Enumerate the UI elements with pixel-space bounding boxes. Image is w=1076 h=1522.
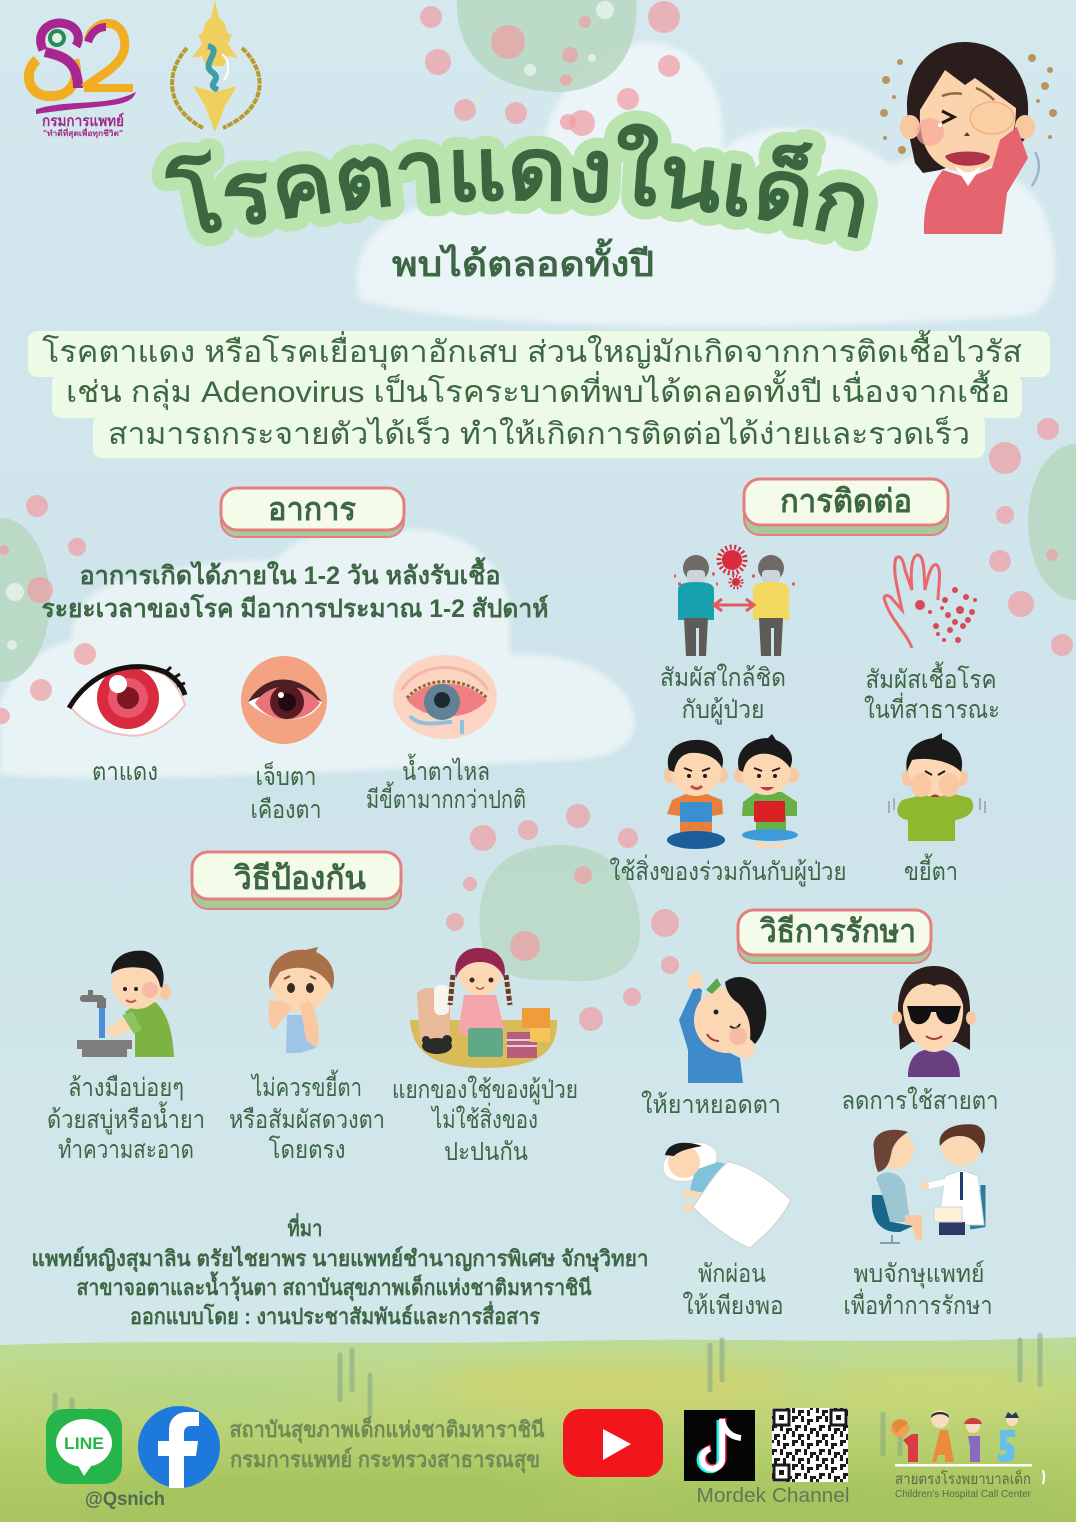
icon: QR code [772, 1408, 848, 1482]
logo: children's hospital call centre 1415: Children's Hospital Call Center [895, 1489, 1032, 1500]
logo tagline: "ทำดีที่สุดเพื่อทุกชีวิต" [43, 127, 123, 139]
text: credits: ที่มา [288, 1212, 322, 1241]
background: virus right [989, 418, 1076, 656]
background: virus centre [446, 804, 679, 1031]
icon: YouTube [563, 1409, 663, 1477]
background: clouds [0, 42, 1055, 778]
label: wash hands: ทำความสะอาด [58, 1136, 194, 1164]
label: separate items: แยกของใช้ของผู้ป่วย [392, 1075, 578, 1105]
logo: medical crest [172, 0, 260, 132]
label: wash hands [47, 1074, 205, 1164]
label: do not rub: หรือสัมผัสดวงตา [229, 1106, 385, 1134]
icon: girl sorting belongings [410, 948, 557, 1068]
label: rest: ให้เพียงพอ [682, 1291, 784, 1320]
label: close contact: สัมผัสใกล้ชิด [660, 663, 786, 692]
icon: watery eye [393, 655, 497, 739]
logo: children's hospital call centre 1415: สายตรงโรงพยาบาลเด็ก [895, 1469, 1031, 1488]
intro line 3: สามารถกระจายตัวได้เร็ว ทำให้เกิดการติดต่อได้ง่ายและรวดเร็ว [108, 415, 970, 451]
heading: transmission: การติดต่อ [780, 483, 912, 519]
label: sore eye [250, 761, 322, 824]
label: separate items: ไม่ใช้สิ่งของ [430, 1102, 538, 1134]
label: public germs: ในที่สาธารณะ [864, 692, 1000, 724]
text: organisation: กรมการแพทย์ กระทรวงสาธารณสุข [230, 1447, 540, 1474]
label: eye drops: ให้ยาหยอดตา [641, 1090, 781, 1119]
label: sharing items: ใช้สิ่งของร่วมกันกับผู้ป่วย [610, 854, 846, 887]
title [152, 110, 878, 252]
icon: sore eye [241, 656, 327, 744]
background: virus left [0, 495, 96, 724]
title text: โรคตาแดงในเด็ก [165, 124, 864, 238]
label: public germs [864, 661, 1000, 724]
icon: boy rubbing eyes [889, 733, 985, 841]
label: separate items [392, 1075, 578, 1166]
title halo: โรคตาแดงในเด็ก [152, 110, 878, 252]
label: watery eye: น้ำตาไหล [402, 753, 490, 786]
label: public germs: สัมผัสเชื้อโรค [866, 661, 996, 694]
intro line 2: เช่น กลุ่ม Adenovirus เป็นโรคระบาดที่พบได้ตลอดทั้งปี เนื่องจากเชื้อ [66, 370, 1010, 411]
label: wash hands: ด้วยสบู่หรือน้ำยา [47, 1101, 205, 1135]
label: wash hands: ล้างมือบ่อยๆ [68, 1074, 184, 1102]
label: watery eye [366, 753, 526, 814]
icon: red eye [69, 667, 185, 736]
label: do not rub: ไม่ควรขยี้ตา [250, 1069, 362, 1102]
intro line 1: โรคตาแดง หรือโรคเยื่อบุตาอักเสบ ส่วนใหญ่มักเกิดจากการติดเชื้อไวรัส [42, 330, 1022, 371]
text: symptom timing: อาการเกิดได้ภายใน 1-2 วัน หลังรับเชื้อ [80, 556, 500, 590]
logo: children's hospital call centre 1415 [883, 1410, 1044, 1500]
icon: child covering face [268, 947, 334, 1053]
icon: doctor and patient [872, 1124, 985, 1243]
heading: transmission [744, 479, 948, 535]
icon: woman with sunglasses [892, 966, 976, 1077]
heading: symptoms: อาการ [268, 491, 356, 527]
label: do not rub [229, 1069, 385, 1164]
label: see ophthalmologist [844, 1260, 992, 1320]
icon: germ hand [884, 555, 977, 648]
heading: prevention: วิธีป้องกัน [233, 860, 366, 896]
text: symptom timing [42, 556, 548, 623]
logo caption: กรมการแพทย์ [42, 112, 124, 130]
text: credits: สาขาจอตาและน้ำวุ้นตา สถาบันสุขภาพเด็กแห่งชาติมหาราชินี [76, 1271, 592, 1302]
label: rest: พักผ่อน [698, 1260, 766, 1288]
label: see ophthalmologist: พบจักษุแพทย์ [854, 1260, 984, 1289]
character: girl rubbing eye [880, 42, 1057, 234]
text: credits: แพทย์หญิงสุมาลิน ตรัยไชยาพร นายแพทย์ชำนาญการพิเศษ จักษุวิทยา [32, 1245, 648, 1273]
label: close contact [660, 663, 786, 725]
icon: Facebook [138, 1406, 220, 1488]
label: close contact: กับผู้ป่วย [682, 696, 764, 725]
panel: intro [28, 330, 1050, 458]
text: credits: ออกแบบโดย : งานประชาสัมพันธ์และการสื่อสาร [130, 1300, 540, 1329]
label: reduce screen time: ลดการใช้สายตา [842, 1086, 998, 1115]
text: channel name: Mordek Channel [696, 1485, 850, 1507]
heading: prevention [192, 852, 401, 909]
icon: LINE [46, 1409, 122, 1484]
label: see ophthalmologist: เพื่อทำการรักษา [844, 1288, 992, 1320]
text: symptom timing: ระยะเวลาของโรค มีอาการประมาณ 1-2 สัปดาห์ [42, 593, 548, 623]
label: rubbing eyes: ขยี้ตา [904, 853, 958, 886]
label: do not rub: โดยตรง [268, 1135, 346, 1164]
icon: two boys sharing items [664, 734, 799, 849]
label: separate items: ปะปนกัน [444, 1138, 528, 1166]
icon: resting in bed [658, 1136, 791, 1248]
heading: treatment: วิธีการรักษา [759, 913, 916, 949]
subtitle: พบได้ตลอดทั้งปี [392, 238, 654, 284]
logo: 82 department of medical services [29, 23, 134, 139]
background: grass field [0, 1335, 1076, 1522]
background: virus top [420, 0, 680, 136]
icon: two people close contact [674, 547, 795, 656]
icon: eye drops [679, 973, 766, 1083]
icon: TikTok [684, 1410, 755, 1481]
heading: symptoms [221, 488, 404, 537]
icon: LINE: LINE [64, 1434, 104, 1453]
text: Line handle: @Qsnich [85, 1489, 165, 1510]
text: credits [32, 1212, 648, 1329]
text: organisation [230, 1415, 544, 1474]
heading: treatment [738, 910, 931, 963]
label: sore eye: เคืองตา [250, 796, 322, 824]
icon: washing hands [77, 951, 174, 1057]
label: sore eye: เจ็บตา [256, 761, 316, 791]
text: organisation: สถาบันสุขภาพเด็กแห่งชาติมหาราชินี [230, 1415, 544, 1444]
label: watery eye: มีขี้ตามากกว่าปกติ [366, 781, 526, 814]
label: rest [682, 1260, 784, 1320]
label: red eye: ตาแดง [92, 758, 158, 786]
